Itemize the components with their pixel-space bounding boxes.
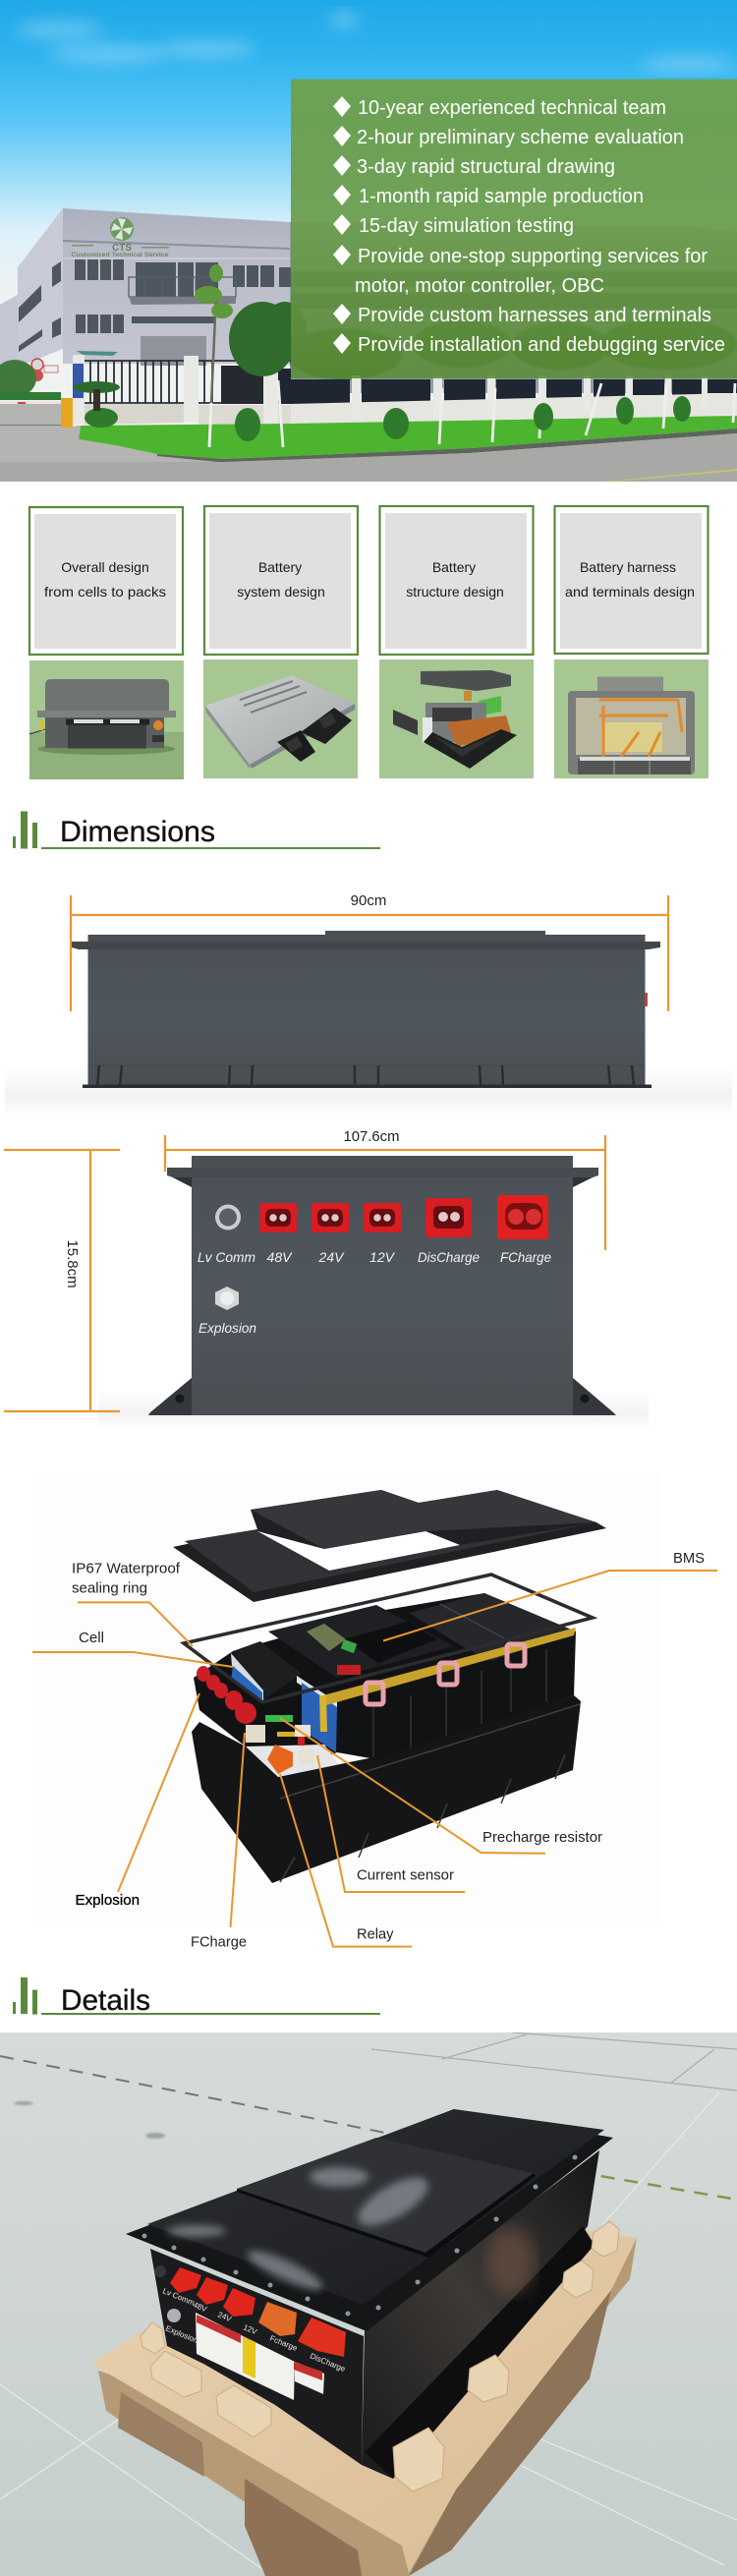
card: battery structure design: structure design xyxy=(406,584,504,600)
list text: 10-year experienced technical team xyxy=(358,97,666,119)
card: battery structure design: Battery xyxy=(432,559,476,575)
callout labels: sealing ring xyxy=(72,1580,147,1596)
list text: motor, motor controller, OBC xyxy=(355,275,604,297)
connector labels xyxy=(198,1249,551,1336)
battery front body xyxy=(148,1156,616,1415)
list text: Provide installation and debugging service xyxy=(358,334,725,356)
card: harness and terminals design xyxy=(554,506,708,654)
connector labels: Explosion xyxy=(198,1320,256,1336)
connector labels: 48V xyxy=(267,1249,293,1265)
icon: explosion valve xyxy=(215,1287,239,1310)
list text: 15-day simulation testing xyxy=(359,215,574,237)
wooden pallet xyxy=(91,2230,637,2576)
floor markings xyxy=(0,2032,737,2576)
front view with connectors xyxy=(4,1128,649,1430)
terminals on front face xyxy=(154,2265,346,2357)
icon: green bars xyxy=(13,1977,37,2015)
top lids xyxy=(173,1490,606,1602)
building logo and sign: CTS xyxy=(112,243,132,254)
copper loops xyxy=(366,1644,525,1704)
image: grey battery enclosure xyxy=(29,660,184,779)
heading: Details: Details xyxy=(61,1984,150,2017)
connector: fast charge xyxy=(497,1195,548,1239)
building logo and sign xyxy=(71,217,169,258)
connector row red xyxy=(197,1666,256,1724)
case labels: 48V xyxy=(192,2301,208,2314)
side view with 90cm dimension xyxy=(5,892,732,1116)
card: battery system design: Battery xyxy=(258,559,302,575)
panel: team capabilities list xyxy=(291,79,737,378)
exploded view of battery pack xyxy=(32,1474,717,1951)
connector labels: 24V xyxy=(318,1249,345,1265)
card: harness and terminals design: and terminals design xyxy=(565,584,695,600)
card: battery system design: system design xyxy=(237,584,325,600)
connector: 24V xyxy=(312,1203,349,1232)
list text: Provide custom harnesses and terminals xyxy=(358,305,711,326)
lower case xyxy=(192,1695,581,1883)
case labels: Fcharge xyxy=(268,2334,299,2353)
dimension: 90cm: 90cm xyxy=(351,892,386,909)
callout labels: BMS xyxy=(673,1550,705,1567)
connector labels: Lv Comm xyxy=(198,1249,255,1265)
building logo and sign: Customized Technical Service xyxy=(71,252,169,258)
icon: green bars xyxy=(13,812,37,849)
wooden blocks xyxy=(141,2221,619,2491)
safety stickers xyxy=(196,2313,324,2400)
connector: discharge xyxy=(425,1198,472,1237)
heading: Details xyxy=(13,1977,380,2017)
card: battery system design xyxy=(204,506,358,655)
connector labels: FCharge xyxy=(500,1249,551,1265)
case labels: 12V xyxy=(242,2323,258,2336)
list text xyxy=(355,97,725,356)
list text: 1-month rapid sample production xyxy=(359,186,644,207)
callout labels: Cell xyxy=(79,1630,104,1646)
battery side view xyxy=(72,931,660,1088)
card: overall design xyxy=(29,507,183,655)
heading: Dimensions xyxy=(13,812,380,849)
card: battery structure design xyxy=(379,506,533,655)
sealing ring frame xyxy=(184,1574,593,1702)
case labels: 24V xyxy=(216,2311,233,2323)
callout labels: Relay xyxy=(357,1926,394,1942)
lawn xyxy=(79,416,737,459)
dimension: 15.8cm: 15.8cm xyxy=(64,1239,81,1288)
card: harness and terminals design: Battery harness xyxy=(580,559,676,575)
heading: Dimensions: Dimensions xyxy=(60,816,215,848)
list text: 3-day rapid structural drawing xyxy=(357,156,615,178)
cells xyxy=(194,1593,576,1777)
list text: 2-hour preliminary scheme evaluation xyxy=(357,127,684,148)
connector: low voltage comm xyxy=(215,1205,241,1231)
image: exploded battery structure xyxy=(379,659,534,778)
hero photo: factory building xyxy=(0,0,737,482)
callout labels: Explosion xyxy=(75,1892,140,1909)
case labels: Lv Comm xyxy=(161,2287,197,2308)
connector labels: 12V xyxy=(369,1249,396,1265)
callout lines xyxy=(32,1571,717,1947)
connector labels: DisCharge xyxy=(418,1249,480,1265)
relay assembly xyxy=(246,1715,339,1777)
image: BMS controller unit xyxy=(203,659,358,778)
battery case xyxy=(126,2109,613,2479)
connector: 48V xyxy=(259,1203,297,1232)
dimension: 107.6cm: 107.6cm xyxy=(344,1128,399,1145)
case labels: Explosion xyxy=(164,2324,199,2345)
card: overall design: Overall design xyxy=(61,559,149,575)
callout labels: Precharge resistor xyxy=(482,1829,602,1846)
list text: Provide one-stop supporting services for xyxy=(358,246,708,267)
lid screws xyxy=(142,2154,578,2316)
callout labels: IP67 Waterproof xyxy=(72,1561,181,1576)
raised top plate xyxy=(237,2138,534,2253)
bullet diamonds xyxy=(333,96,351,354)
case labels: DisCharge xyxy=(309,2352,347,2374)
connector: 12V xyxy=(364,1203,401,1232)
callout labels: FCharge xyxy=(191,1934,247,1951)
card: overall design: from cells to packs xyxy=(44,584,166,600)
case labels xyxy=(161,2287,347,2374)
callout labels: Current sensor xyxy=(357,1867,454,1883)
photo: battery pack on wooden pallet xyxy=(0,2032,737,2576)
callout labels xyxy=(72,1550,705,1951)
gate fence xyxy=(85,361,291,403)
image: harness and terminals inside xyxy=(554,659,709,778)
